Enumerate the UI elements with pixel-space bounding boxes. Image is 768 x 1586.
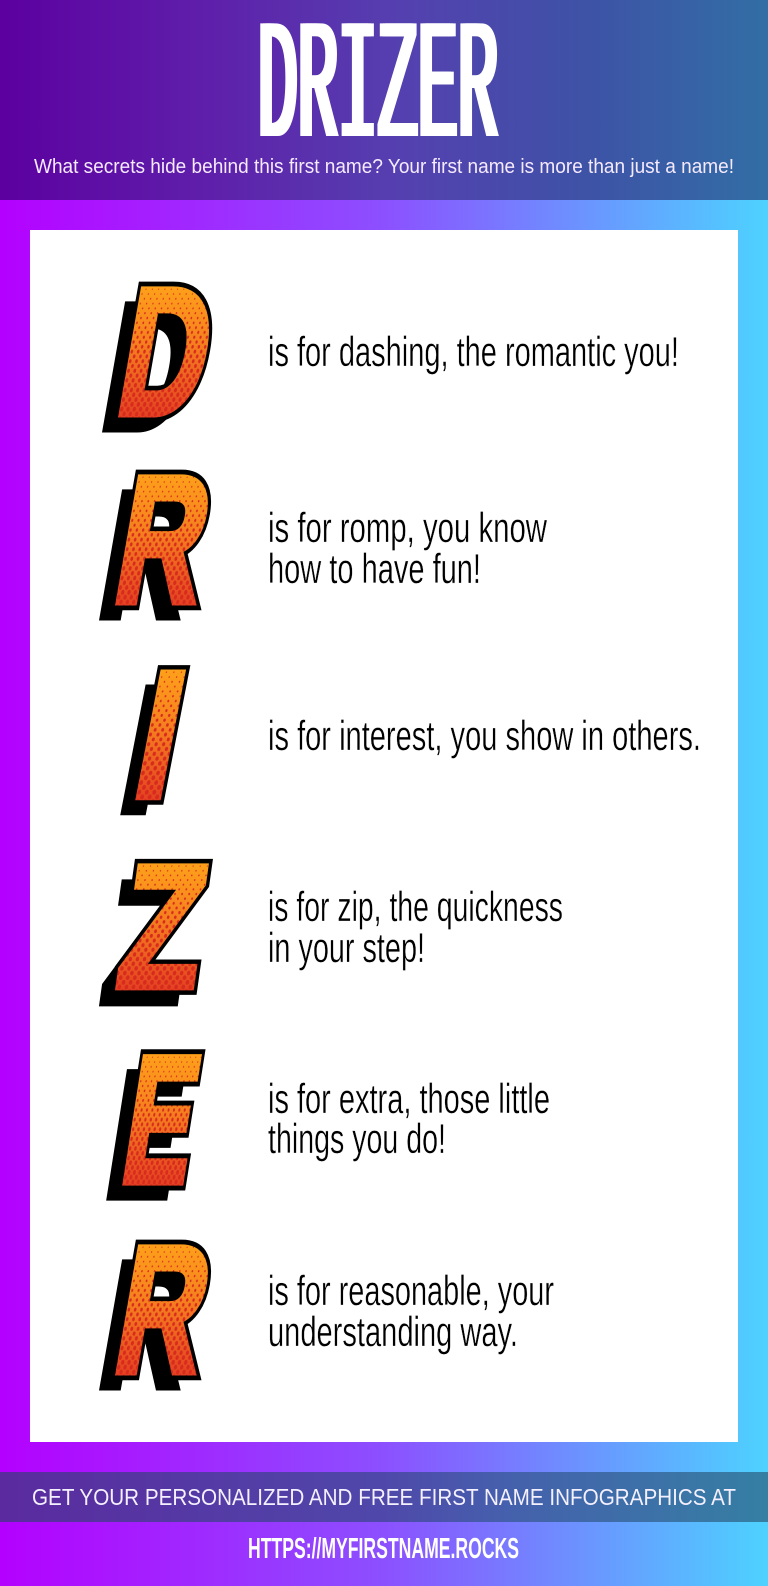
header band <box>0 0 768 200</box>
text: Z line <box>268 883 563 971</box>
text: E line: is for extra, those little <box>268 1075 550 1122</box>
letter R second: R <box>103 1208 224 1411</box>
text: R line: is for romp, you know <box>268 504 547 551</box>
letter D: D <box>106 250 227 453</box>
footer url: HTTPS://MYFIRSTNAME.ROCKS <box>248 1533 519 1565</box>
text: Z line: is for zip, the quickness <box>268 883 563 930</box>
title: DRIZER <box>255 0 495 188</box>
text: second R line: understanding way. <box>268 1308 518 1355</box>
letter I: I <box>122 634 200 836</box>
letter R: R <box>87 453 208 656</box>
letter Z: Z <box>109 829 218 1025</box>
footer band <box>0 1472 768 1522</box>
letter E: E <box>112 1020 211 1221</box>
text: R line: how to have fun! <box>268 545 481 592</box>
letter E: E <box>96 1035 195 1236</box>
text: R line <box>268 504 547 592</box>
letter D: D <box>106 250 227 453</box>
letter E: E <box>112 1020 211 1221</box>
text: Z line: in your step! <box>268 924 425 971</box>
letter R: R <box>103 438 224 641</box>
letter I: I <box>122 634 200 836</box>
letter R: R <box>103 438 224 641</box>
letter R second: R <box>87 1223 208 1426</box>
text: second R line <box>268 1267 554 1355</box>
letter Z: Z <box>93 845 202 1041</box>
white content panel <box>30 230 738 1442</box>
letter D: D <box>90 265 211 468</box>
text: E line: things you do! <box>268 1115 446 1162</box>
text: E line <box>268 1075 550 1162</box>
text: second R line: is for reasonable, your <box>268 1267 554 1314</box>
letter R second: R <box>103 1208 224 1411</box>
letter I: I <box>107 649 185 851</box>
letter Z: Z <box>109 829 218 1025</box>
subtitle: What secrets hide behind this first name? Your first name is more than just a name! <box>34 156 734 178</box>
